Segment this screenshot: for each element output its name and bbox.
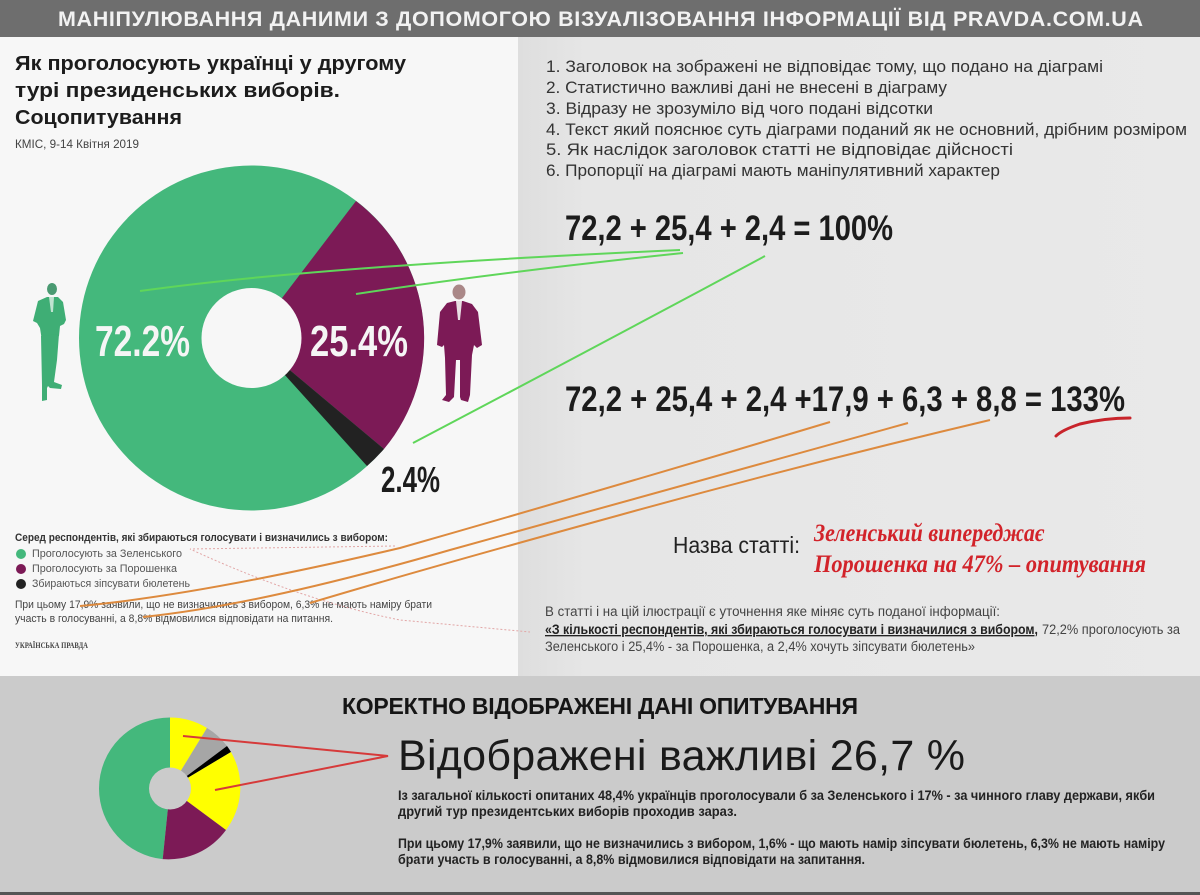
corrected data explanation: другий тур президентських виборів проходив зараз. xyxy=(398,804,737,819)
article title label: Назва статті: xyxy=(673,532,800,558)
legend heading: Серед респондентів, які збираються голосувати і визначились з вибором: xyxy=(15,532,388,544)
corrected data explanation: Із загальної кількості опитаних 48,4% українців проголосували б за Зеленського і 17% - за чинного главу держави, якби xyxy=(398,788,1155,803)
numbered list of manipulations: 4. Текст який пояснює суть діаграми поданий як не основний, дрібним розміром xyxy=(546,120,1187,139)
chart title: Як проголосують українці у другому xyxy=(15,52,407,75)
chart title: Соцопитування xyxy=(15,106,182,129)
legend item: spoil ballot: Збираються зіпсувати бюлетень xyxy=(32,578,190,590)
main donut chart xyxy=(79,166,440,510)
numbered list of manipulations xyxy=(546,57,1187,180)
header banner xyxy=(0,0,1200,37)
article headline in red: Зеленський випереджає xyxy=(813,520,1045,547)
right panel background xyxy=(518,37,1200,677)
orange connector lines xyxy=(80,420,990,617)
footnote text xyxy=(15,599,432,625)
clarification note: 72,2% проголосують за xyxy=(1042,622,1180,637)
value: 25.4%: 25.4% xyxy=(310,317,408,366)
value: 2.4%: 2.4% xyxy=(381,459,440,500)
legend xyxy=(15,532,388,590)
green connector lines xyxy=(140,250,765,443)
numbered list of manipulations: 6. Пропорції на діаграмі мають маніпулятивний характер xyxy=(546,161,1000,180)
clarification note: «З кількості респондентів, які збираються голосувати і визначилися з вибором, xyxy=(545,622,1038,637)
corrected data explanation: брати участь в голосуванні, а 8,8% відмовилися відповідати на запитання. xyxy=(398,852,865,867)
article headline in red: Порошенка на 47% – опитування xyxy=(813,551,1146,578)
highlighted value: Відображені важливі 26,7 % xyxy=(398,732,965,780)
chart title xyxy=(15,52,407,129)
clarification note: Зеленського і 25,4% - за Порошенка, а 2,4% хочуть зіпсувати бюлетень» xyxy=(545,639,975,654)
value: 72.2%: 72.2% xyxy=(95,317,190,366)
chart title: турі президенських виборів. xyxy=(15,79,340,102)
numbered list of manipulations: 5. Як наслідок заголовок статті не відповідає дійсності xyxy=(546,140,1013,159)
legend item: Poroshenko: Проголосують за Порошенка xyxy=(32,563,178,575)
clarification note: В статті і на цій ілюстрації є уточнення яке міняє суть поданої інформації: xyxy=(545,604,1000,619)
article headline in red xyxy=(813,520,1146,578)
dotted pink connector xyxy=(190,546,530,632)
corrected donut chart xyxy=(99,718,240,859)
icon: Zelensky figure xyxy=(33,283,66,401)
red connector lines xyxy=(183,736,388,790)
bottom section heading: КОРЕКТНО ВІДОБРАЖЕНІ ДАНІ ОПИТУВАННЯ xyxy=(342,693,858,719)
header banner: МАНІПУЛЮВАННЯ ДАНИМИ З ДОПОМОГОЮ ВІЗУАЛІЗОВАННЯ ІНФОРМАЦІЇ ВІД PRAVDA.COM.UA xyxy=(58,7,1143,31)
publisher logo text: УКРАЇНСЬКА ПРАВДА xyxy=(15,641,88,650)
survey source: КМІС, 9-14 Квітня 2019 xyxy=(15,137,139,151)
footnote text: При цьому 17,9% заявили, що не визначились з вибором, 6,3% не мають наміру брати xyxy=(15,599,432,611)
icon: Poroshenko figure xyxy=(437,284,482,402)
legend item: Zelensky: Проголосують за Зеленського xyxy=(32,548,182,560)
equation: 100%: 72,2 + 25,4 + 2,4 = 100% xyxy=(565,209,893,248)
left panel background xyxy=(0,37,518,677)
clarification note xyxy=(545,604,1180,654)
bottom panel background xyxy=(0,676,1200,893)
red underline under 133% xyxy=(1056,418,1130,436)
numbered list of manipulations: 1. Заголовок на зображені не відповідає тому, що подано на діаграмі xyxy=(546,57,1103,76)
footnote text: участь в голосуванні, а 8,8% відмовилися відповідати на питання. xyxy=(15,613,333,625)
corrected data explanation xyxy=(398,788,1165,867)
numbered list of manipulations: 3. Відразу не зрозуміло від чого подані відсотки xyxy=(546,99,933,118)
numbered list of manipulations: 2. Статистично важливі дані не внесені в діаграму xyxy=(546,78,947,97)
